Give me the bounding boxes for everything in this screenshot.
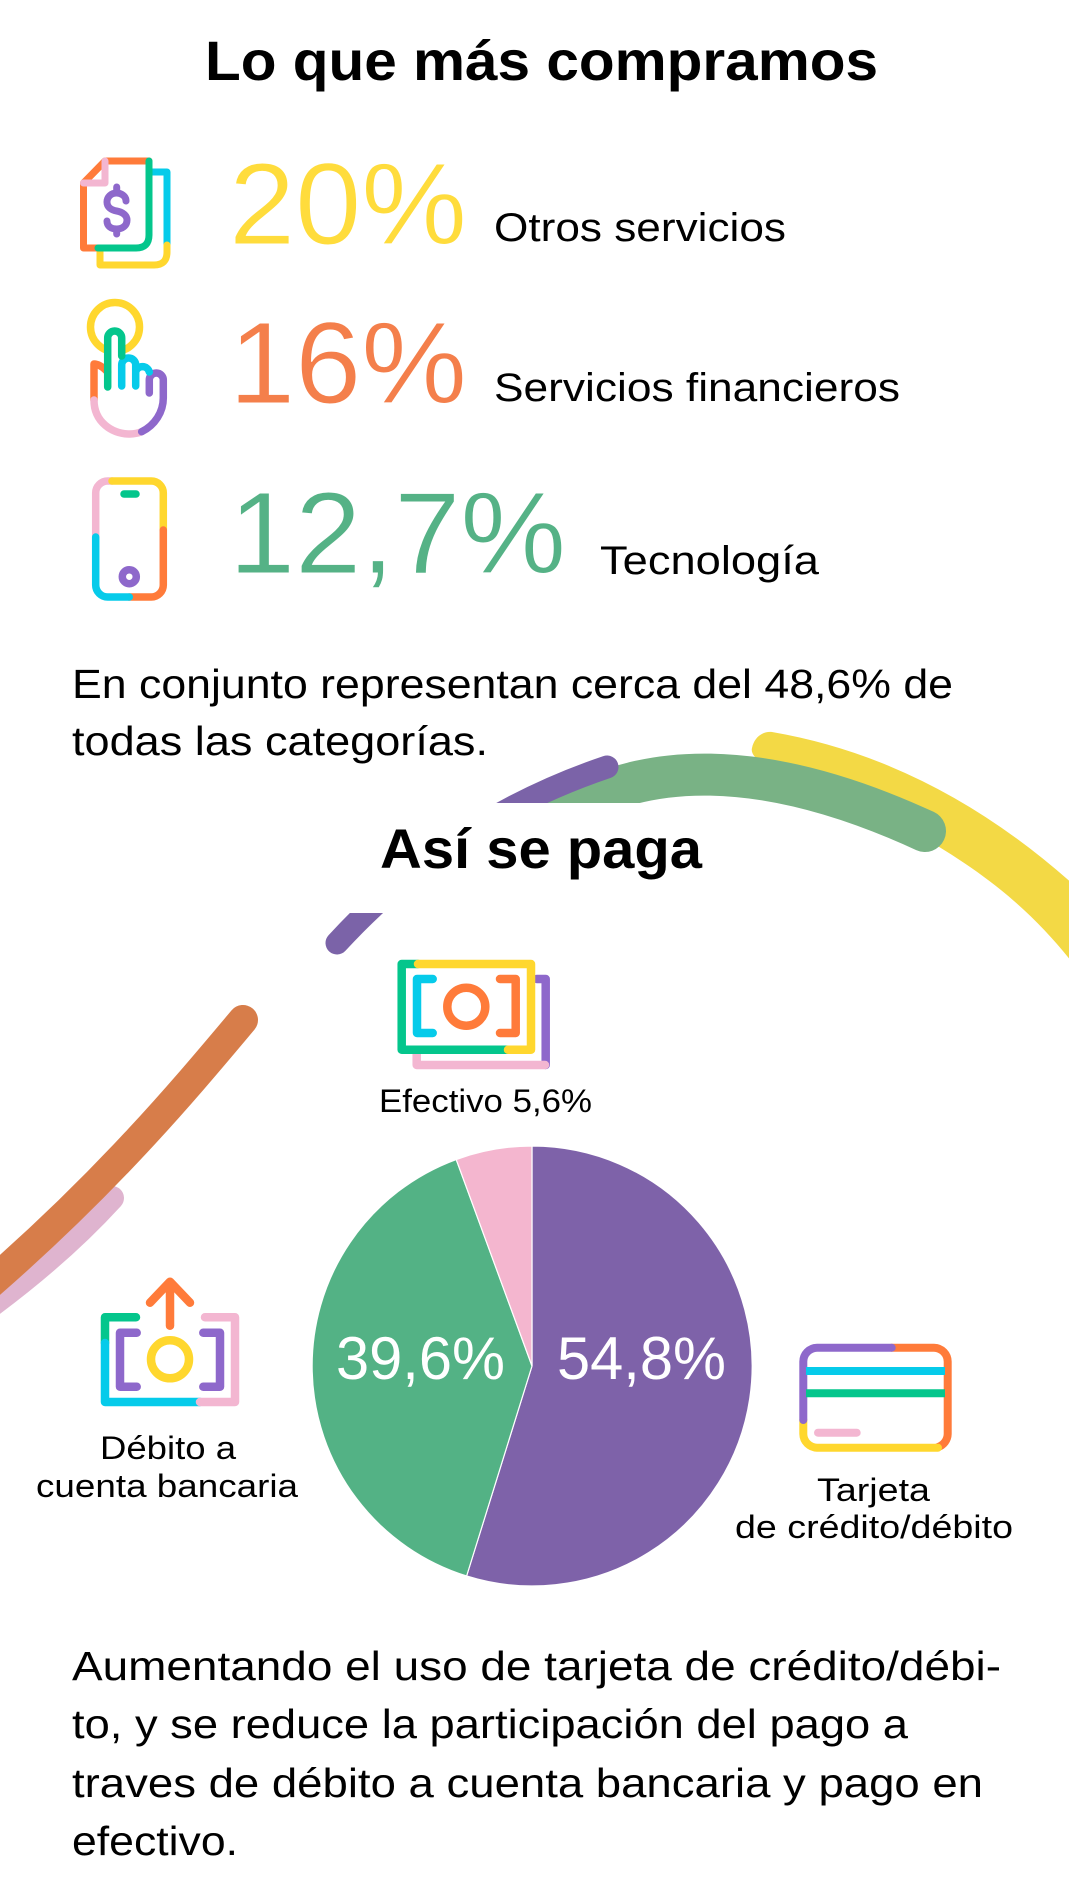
text block: summary: todas las categorías. xyxy=(72,718,488,764)
icon: cash bills xyxy=(402,964,546,1065)
icon: hand tapping xyxy=(90,302,163,434)
icon: smartphone xyxy=(96,481,163,597)
label: Servicios financieros: Servicios financieros xyxy=(494,366,900,410)
label: Efectivo 5,6%: Efectivo 5,6% xyxy=(379,1083,592,1119)
label: Débito a cuenta bancaria xyxy=(36,1430,298,1504)
label: Tarjeta de crédito/débito: de crédito/débito xyxy=(735,1509,1013,1545)
row: Tecnología xyxy=(96,468,820,598)
icon: document with dollar xyxy=(84,161,167,265)
text block: summary: En conjunto representan cerca del 48,6% de xyxy=(72,661,953,707)
pie value: 54,8%: 54,8% xyxy=(557,1325,726,1392)
label: Tarjeta de crédito/débito: Tarjeta xyxy=(817,1472,930,1508)
text block: conclusion: efectivo. xyxy=(72,1818,238,1864)
slice: bank debit 39.6% xyxy=(312,1160,532,1576)
background swooshes xyxy=(0,732,1069,1310)
text block: conclusion xyxy=(72,1643,1001,1864)
stat: 20%: 20% xyxy=(229,139,467,269)
icon: bank debit upload xyxy=(105,1282,235,1402)
text block: conclusion: to, y se reduce la participación del pago a xyxy=(72,1701,908,1747)
stat: 16%: 16% xyxy=(229,298,467,428)
label: Tecnología: Tecnología xyxy=(600,539,820,583)
text block: conclusion: Aumentando el uso de tarjeta de crédito/débi- xyxy=(72,1643,1001,1689)
pie value: 39,6%: 39,6% xyxy=(336,1325,505,1392)
slice: cash 5.6% xyxy=(456,1146,532,1366)
heading: Así se paga: Así se paga xyxy=(380,817,703,880)
row: Servicios financieros xyxy=(90,298,900,434)
row: Otros servicios xyxy=(84,139,786,269)
text block: summary xyxy=(72,661,953,764)
label: Débito a cuenta bancaria: cuenta bancaria xyxy=(36,1468,298,1504)
label: Tarjeta de crédito/débito xyxy=(735,1472,1013,1545)
pie chart: payment methods xyxy=(312,1146,752,1586)
label: Otros servicios: Otros servicios xyxy=(494,206,786,250)
stat: 12,7%: 12,7% xyxy=(229,468,566,598)
text block: conclusion: traves de débito a cuenta bancaria y pago en xyxy=(72,1760,983,1806)
title: Lo que más compramos: Lo que más compramos xyxy=(205,29,878,92)
label: Débito a cuenta bancaria: Débito a xyxy=(100,1430,236,1466)
slice: credit/debit card 54.8% xyxy=(467,1146,752,1586)
icon: credit card xyxy=(803,1348,948,1448)
